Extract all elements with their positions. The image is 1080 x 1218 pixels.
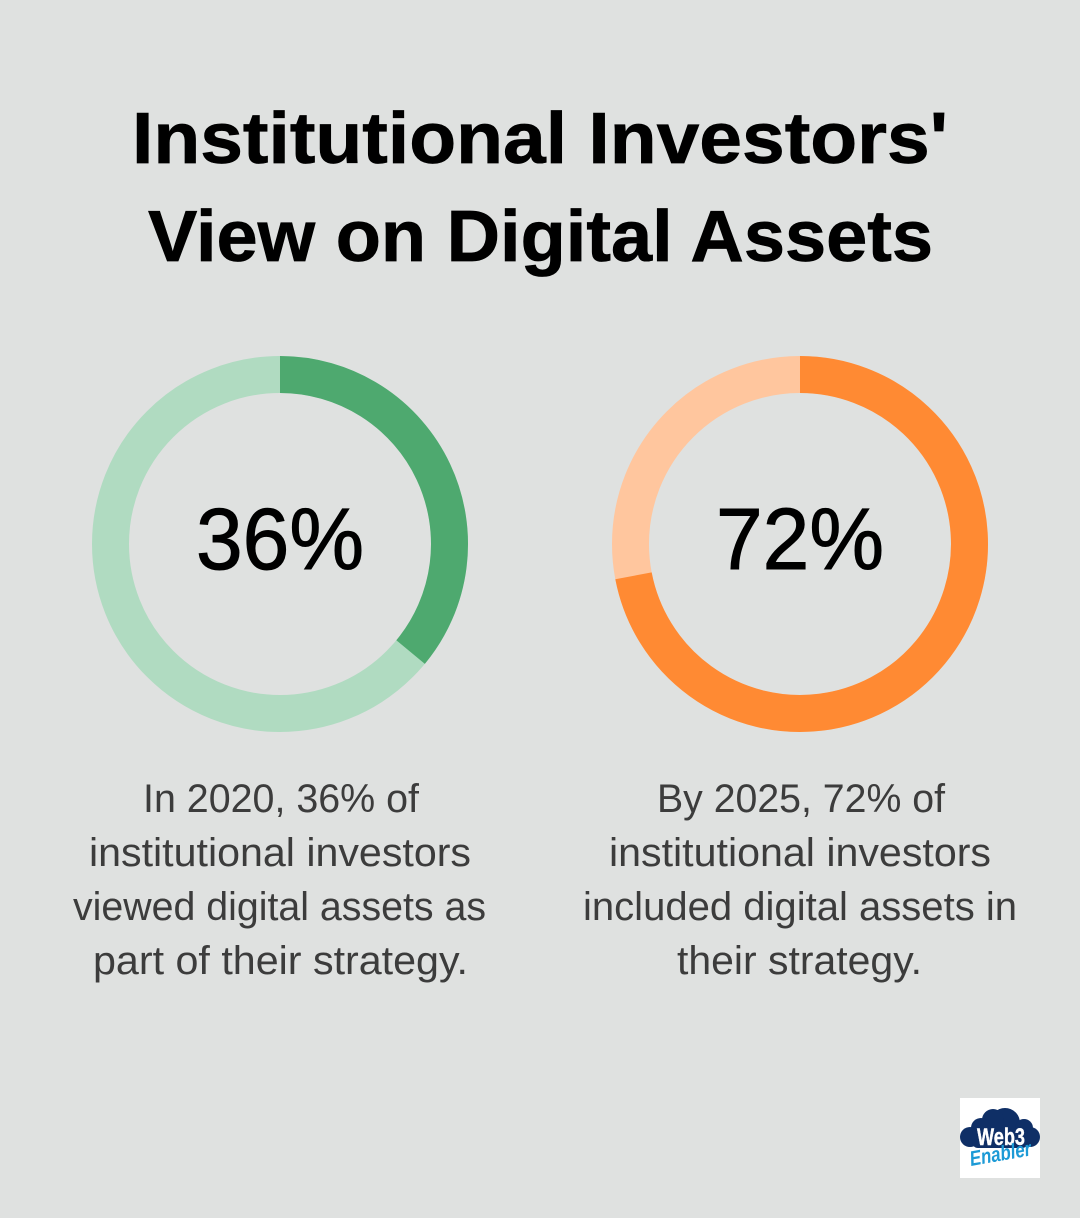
donut chart: 72% bbox=[630, 374, 970, 714]
description: 2020: part of their strategy. bbox=[93, 939, 468, 983]
logo: Web3 Enabler bbox=[960, 1098, 1040, 1178]
description: 2020: institutional investors bbox=[89, 831, 471, 875]
description: 2020: In 2020, 36% of bbox=[143, 777, 420, 821]
title bbox=[132, 99, 948, 277]
logo wordmark: Enabler bbox=[968, 1137, 1034, 1171]
value: 72%: 72% bbox=[716, 491, 884, 588]
logo wordmark: Web3 bbox=[977, 1124, 1025, 1151]
panel: 2020 statistic bbox=[73, 374, 486, 983]
logo wordmark bbox=[968, 1124, 1034, 1171]
icon: cloud bbox=[960, 1108, 1040, 1148]
title: Institutional Investors' bbox=[132, 99, 948, 179]
title: View on Digital Assets bbox=[148, 197, 933, 277]
description: 2025 bbox=[583, 777, 1017, 983]
description: 2025: their strategy. bbox=[677, 939, 922, 983]
description: 2020: viewed digital assets as bbox=[73, 885, 486, 929]
description: 2025: included digital assets in bbox=[583, 885, 1017, 929]
panel: 2025 statistic bbox=[583, 374, 1017, 983]
donut chart: 36% bbox=[110, 374, 450, 714]
description: 2025: institutional investors bbox=[609, 831, 991, 875]
value: 36%: 36% bbox=[196, 491, 364, 588]
description: 2025: By 2025, 72% of bbox=[657, 777, 946, 821]
description: 2020 bbox=[73, 777, 486, 983]
